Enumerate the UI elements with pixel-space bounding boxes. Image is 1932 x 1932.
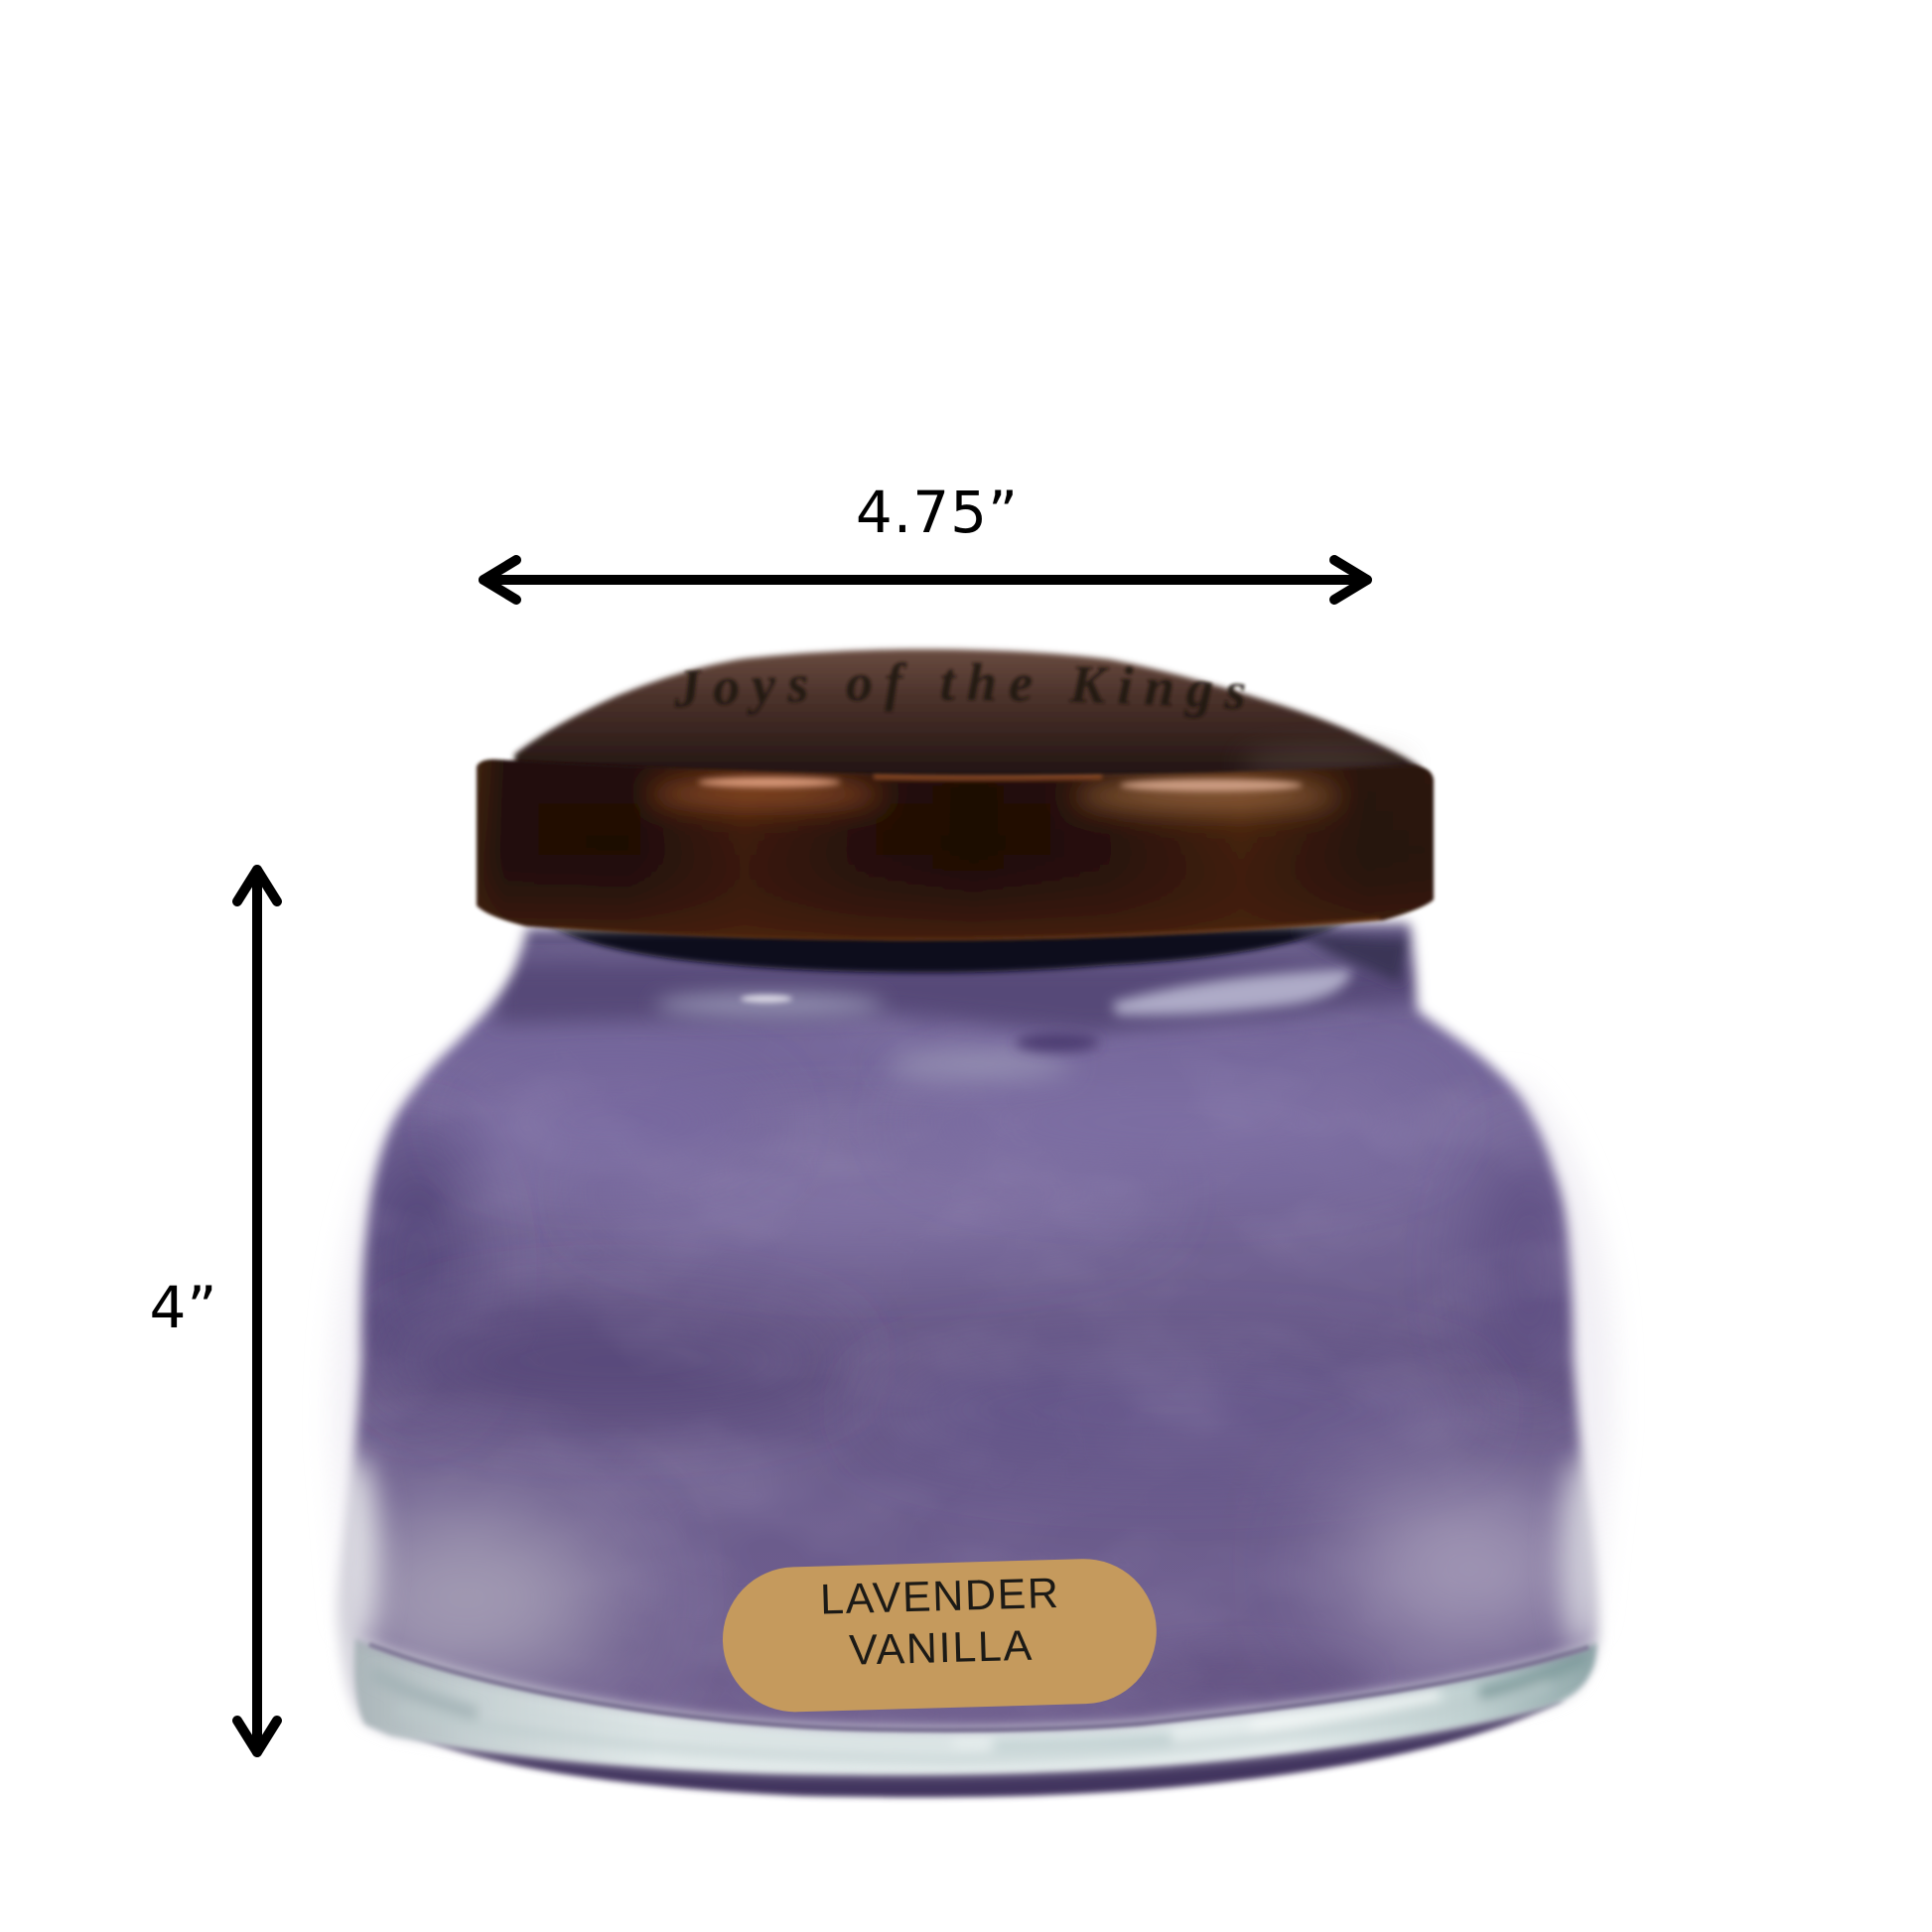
pale glass right edge bbox=[1561, 1454, 1604, 1653]
glass base rim bbox=[354, 1638, 1596, 1774]
neck highlight right bbox=[1112, 969, 1352, 1016]
band lower gloss bbox=[556, 920, 1380, 942]
pale lower right wax bbox=[1340, 1489, 1598, 1648]
band highlight left bbox=[645, 780, 884, 808]
band top edge line bbox=[874, 776, 1102, 778]
label text: VANILLA bbox=[849, 1622, 1033, 1675]
width dimension arrow bbox=[483, 560, 1367, 600]
pale lower left wax bbox=[318, 1509, 616, 1688]
height dimension arrow bbox=[237, 870, 277, 1752]
pale glass left edge bbox=[332, 1454, 379, 1653]
band vertical shading bbox=[467, 750, 1449, 968]
height label: 4” bbox=[150, 1274, 217, 1341]
neck highlight glint bbox=[741, 995, 792, 1003]
lid dome bbox=[514, 649, 1420, 779]
width label: 4.75” bbox=[856, 479, 1019, 546]
wax mottling bbox=[357, 1072, 1579, 1704]
lid bbox=[474, 644, 1437, 943]
faint glass halo bbox=[333, 1082, 1614, 1628]
label pill bbox=[721, 1557, 1159, 1714]
glass outer body bbox=[338, 1370, 1600, 1774]
jar base shadow bbox=[369, 1688, 1564, 1797]
wax edge rim bbox=[369, 1644, 1588, 1729]
band highlight right bbox=[1072, 781, 1340, 811]
wax cloud texture bbox=[361, 1098, 1567, 1654]
label text: LAVENDER bbox=[819, 1570, 1059, 1624]
lid dome right sheen bbox=[1241, 751, 1415, 772]
scent label bbox=[721, 1557, 1159, 1714]
neck shading bbox=[496, 963, 1430, 1033]
glass rim streaks bbox=[372, 1656, 1587, 1759]
candle jar bbox=[332, 644, 1613, 1803]
infographic: candle jar with dimensions bbox=[152, 490, 1613, 1803]
lid engraving: Joys of the Kings bbox=[673, 660, 1247, 719]
wax light clouds bbox=[884, 1051, 1072, 1077]
lid band bbox=[474, 757, 1437, 943]
wax dark spot bbox=[1016, 1033, 1099, 1052]
dark neck band bbox=[536, 918, 1350, 973]
neck highlight left bbox=[655, 992, 884, 1018]
wax fill bbox=[345, 915, 1600, 1737]
